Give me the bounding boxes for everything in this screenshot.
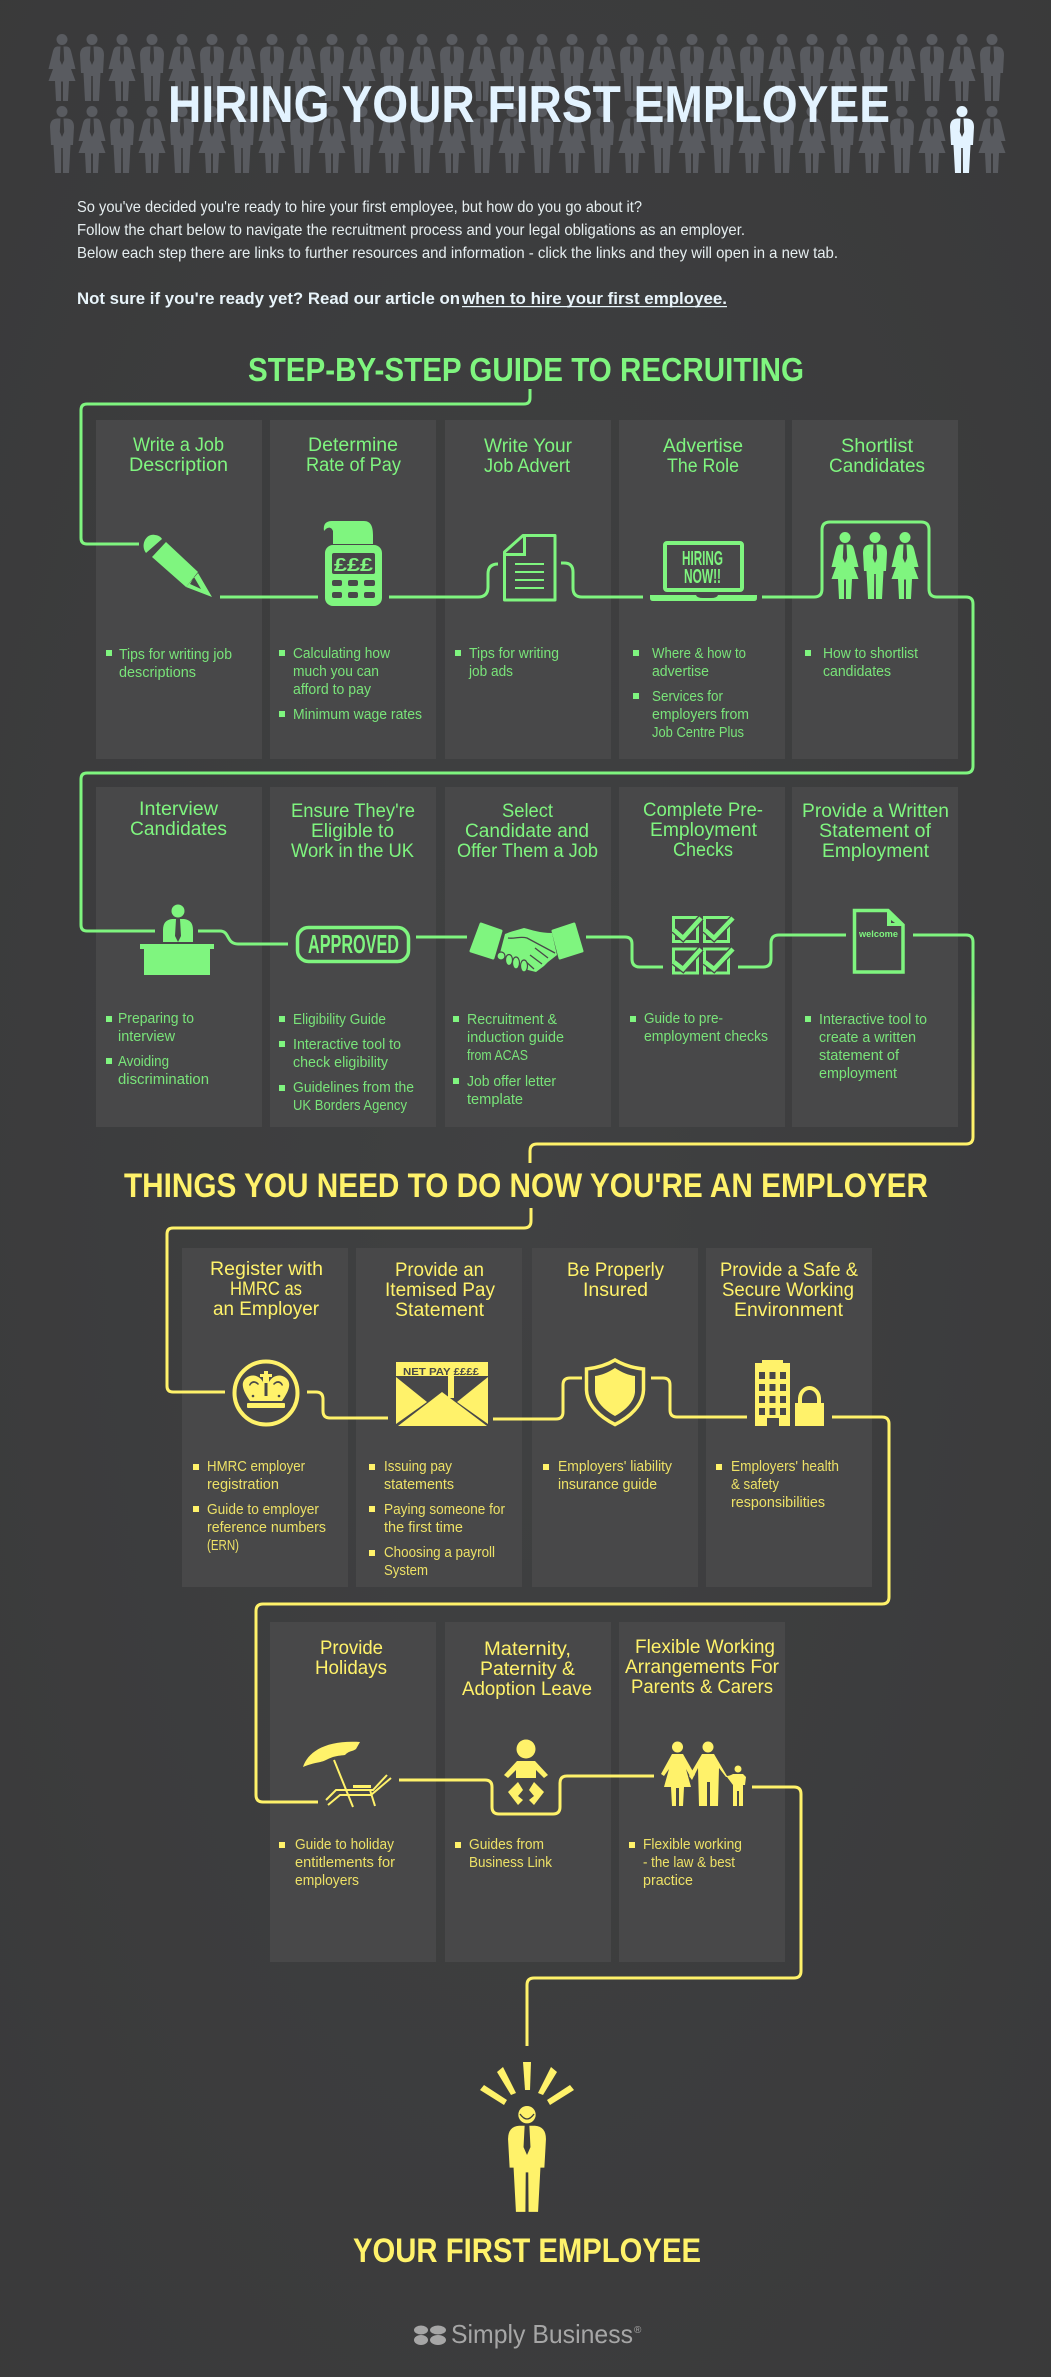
panel: interview candidates: Candidates [130, 819, 227, 840]
panel: be properly insured: Insured [583, 1280, 648, 1301]
connector: checks to letter [738, 935, 846, 967]
heading: step-by-step guide: STEP-BY-STEP GUIDE TO RECRUITING [248, 351, 804, 388]
panel: write your job advert: Tips for writing [469, 646, 559, 662]
panel: ensure eligible to work: UK Borders Agency [293, 1098, 408, 1114]
title: HIRING YOUR FIRST EMPLOYEE [168, 76, 890, 134]
panel: flexible working arrangements: Arrangements For [625, 1657, 780, 1678]
panel: register with HMRC: HMRC employer [207, 1459, 305, 1475]
connector: handshake to checks [586, 937, 663, 967]
heading: your first employee: YOUR FIRST EMPLOYEE [353, 2232, 701, 2270]
panel: select candidate and offer job: induction guide [467, 1030, 564, 1046]
panel: write a job description: Tips for writing job [119, 647, 232, 663]
panel: ensure eligible to work: Eligibility Guide [293, 1012, 386, 1028]
panel: write your job advert: Job Advert [484, 456, 571, 477]
connector: HMRC to envelope [307, 1392, 388, 1418]
panel: advertise the role [619, 420, 785, 759]
heading: things you need to do: THINGS YOU NEED TO DO NOW YOU'RE AN EMPLOYER [124, 1167, 928, 1205]
panel: be properly insured: Employers' liability [558, 1459, 673, 1475]
panel: advertise the role: advertise [652, 664, 709, 680]
panel: write your job advert: Write Your [484, 436, 573, 457]
panel: register with HMRC: registration [207, 1477, 279, 1493]
intro text [77, 199, 838, 262]
panel: select candidate and offer job: template [467, 1092, 523, 1108]
panel: select candidate and offer job: Recruitment & [467, 1012, 557, 1028]
panel: maternity, paternity and adoption leave: Adoption Leave [462, 1679, 592, 1700]
panel: pre-employment checks [619, 787, 785, 1127]
panel: safe and secure environment: Provide a Safe & [720, 1260, 858, 1281]
panel: pre-employment checks: Complete Pre- [643, 800, 763, 821]
panel: interview candidates: discrimination [118, 1072, 209, 1088]
panel: select candidate and offer job: from ACAS [467, 1048, 528, 1064]
panel: write your job advert: job ads [468, 664, 513, 680]
highlighted employee figure [950, 106, 974, 173]
panel: ensure eligible to work: Guidelines from the [293, 1080, 414, 1096]
panel: safe and secure environment: Environment [734, 1300, 844, 1321]
panel: register with HMRC: Register with [210, 1259, 323, 1280]
panel: provide holidays: employers [295, 1873, 359, 1889]
intro text: Below each step there are links to further resources and information - click the links and they will open in a new tab. [77, 245, 838, 262]
icon: calculator: £££ [334, 555, 373, 575]
connector: lounger to baby [399, 1776, 654, 1814]
icon: person at desk [140, 904, 214, 975]
panel: written statement of employment: create a written [819, 1030, 916, 1046]
connector: interview to approved [198, 931, 288, 944]
icon: final employee with rays [480, 2062, 574, 2212]
panel: ensure eligible to work: Interactive tool to [293, 1037, 401, 1053]
bold prompt with link [77, 289, 727, 308]
icon: parasol and lounger [303, 1742, 391, 1807]
panel: safe and secure environment: responsibilities [731, 1495, 825, 1511]
connector: heading to HMRC [167, 1208, 531, 1392]
panel: ensure eligible to work: Work in the UK [291, 841, 414, 862]
connector: approved to handshake [416, 936, 467, 938]
panel: written statement of employment [792, 787, 958, 1127]
panel: maternity, paternity and adoption leave: Business Link [469, 1855, 553, 1871]
panel: flexible working arrangements: practice [643, 1873, 693, 1889]
panel: register with HMRC: HMRC as [230, 1279, 302, 1300]
panel: advertise the role: employers from [652, 707, 749, 723]
panel: provide holidays: entitlements for [295, 1855, 395, 1871]
panel: advertise the role: Where & how to [652, 646, 746, 662]
panel: written statement of employment: employment [819, 1066, 897, 1082]
icon: pencil [144, 535, 212, 597]
panel: shortlist candidates: Candidates [829, 456, 925, 477]
panel: safe and secure environment: Secure Working [722, 1280, 854, 1301]
panel: write a job description: Description [129, 455, 228, 476]
panel: pre-employment checks: employment checks [644, 1029, 768, 1045]
icon: four checkboxes [674, 918, 733, 973]
logo: Simply Business: Simply Business [451, 2319, 633, 2349]
panel: select candidate and offer job: Select [502, 801, 554, 822]
panel: register with HMRC [182, 1248, 348, 1587]
icon: calculator [324, 521, 382, 606]
panel: select candidate and offer job [445, 787, 611, 1127]
panel: ensure eligible to work: Eligible to [311, 821, 394, 842]
icon: laptop [650, 543, 757, 601]
panel: provide holidays: Provide [320, 1638, 383, 1659]
connector: shield to building [651, 1378, 747, 1417]
panel: register with HMRC: an Employer [213, 1299, 320, 1320]
panel: write a job description [96, 420, 262, 759]
panel: written statement of employment: Provide a Written [802, 801, 949, 822]
icon: family [661, 1742, 746, 1806]
panel: interview candidates: interview [118, 1029, 176, 1045]
panel: flexible working arrangements: Flexible Working [635, 1637, 775, 1658]
panel: itemised pay statement: System [384, 1563, 428, 1579]
panel: written statement of employment: Statement of [819, 821, 932, 842]
panel: advertise the role: The Role [667, 456, 739, 477]
crowd of people illustration [48, 34, 1006, 173]
panel: itemised pay statement: statements [384, 1477, 454, 1493]
icon: approved stamp [298, 928, 408, 962]
connector: letter to second heading with colour fade [530, 935, 973, 1163]
panel: flexible working arrangements [619, 1622, 785, 1962]
panel: pre-employment checks: Guide to pre- [644, 1011, 723, 1027]
panel: shortlist candidates: How to shortlist [823, 646, 918, 662]
panel: safe and secure environment: Employers' health [731, 1459, 839, 1475]
panel: itemised pay statement: Itemised Pay [385, 1280, 495, 1301]
panel: provide holidays: Guide to holiday [295, 1837, 395, 1853]
panel: ensure eligible to work: check eligibility [293, 1055, 389, 1071]
panel: advertise the role: Job Centre Plus [652, 725, 744, 741]
panel: shortlist candidates: candidates [823, 664, 891, 680]
connector: heading to pencil [81, 389, 530, 544]
panel: written statement of employment: Employment [822, 841, 930, 862]
connector: envelope to shield [493, 1378, 582, 1419]
connector: calculator to document [389, 564, 498, 597]
intro text: So you've decided you're ready to hire your first employee, but how do you go about it? [77, 199, 642, 216]
icon: welcome letter: welcome [858, 929, 898, 939]
panel: flexible working arrangements: - the law & best [643, 1855, 735, 1871]
icon: three candidates [832, 532, 918, 599]
panel: provide holidays: Holidays [315, 1658, 387, 1679]
icon: handshake [471, 924, 582, 972]
panel: select candidate and offer job: Candidate and [465, 821, 589, 842]
panel: determine rate of pay: Rate of Pay [306, 455, 401, 476]
bold prompt with link: Not sure if you're ready yet? Read our article on [77, 289, 460, 308]
panel: write your job advert [445, 420, 611, 759]
panel: determine rate of pay [270, 420, 436, 759]
logo: Simply Business: ® [634, 2325, 642, 2336]
panel: itemised pay statement: Statement [395, 1300, 485, 1321]
panel: be properly insured [532, 1248, 698, 1587]
panel: determine rate of pay: much you can [293, 664, 379, 680]
icon: shield [586, 1360, 644, 1424]
panel: itemised pay statement: Provide an [395, 1260, 484, 1281]
panel: advertise the role: Advertise [663, 436, 743, 457]
connector: laptop around candidates to second row [81, 522, 973, 931]
panel: maternity, paternity and adoption leave: Maternity, [484, 1639, 571, 1660]
connector: family to final employee [527, 1787, 801, 2046]
panel: determine rate of pay: Calculating how [293, 646, 390, 662]
panel: write a job description: Write a Job [133, 435, 224, 456]
icon: crown in circle [234, 1362, 298, 1424]
panel: written statement of employment: Interactive tool to [819, 1012, 927, 1028]
icon: pay envelope [396, 1362, 488, 1426]
panel: maternity, paternity and adoption leave [445, 1622, 611, 1962]
panel: be properly insured: insurance guide [558, 1477, 657, 1493]
panel: interview candidates: Preparing to [118, 1011, 194, 1027]
panel: determine rate of pay: Minimum wage rates [293, 707, 422, 723]
panel: advertise the role: Services for [652, 689, 723, 705]
panel: itemised pay statement: Paying someone for [384, 1502, 505, 1518]
panel: register with HMRC: (ERN) [207, 1538, 239, 1554]
panel: maternity, paternity and adoption leave: Paternity & [480, 1659, 575, 1680]
panel: select candidate and offer job: Job offer letter [467, 1074, 556, 1090]
panel: select candidate and offer job: Offer Them a Job [457, 841, 598, 862]
icon: document [503, 534, 555, 600]
panel: determine rate of pay: Determine [308, 435, 398, 456]
panel: shortlist candidates: Shortlist [841, 436, 914, 457]
panel: itemised pay statement: the first time [384, 1520, 463, 1536]
panel: interview candidates: Avoiding [118, 1054, 169, 1070]
panel: pre-employment checks: Employment [650, 820, 758, 841]
panel: shortlist candidates [792, 420, 958, 759]
panel: itemised pay statement: Issuing pay [384, 1459, 453, 1475]
connector: document to laptop [561, 563, 643, 597]
panel: provide holidays [270, 1622, 436, 1962]
panel: interview candidates: Interview [139, 799, 218, 820]
icon: welcome letter [854, 910, 903, 972]
panel: be properly insured: Be Properly [567, 1260, 664, 1281]
panel: flexible working arrangements: Parents & Carers [631, 1677, 773, 1698]
connector: pencil to calculator [220, 596, 318, 598]
panel: flexible working arrangements: Flexible working [643, 1837, 742, 1853]
panel: ensure eligible to work [270, 787, 436, 1127]
panel: safe and secure environment: & safety [731, 1477, 780, 1493]
icon: laptop: NOW!! [684, 566, 721, 588]
bold prompt with link: when to hire your first employee. [461, 289, 727, 308]
icon: laptop: HIRING [682, 548, 723, 570]
intro text: Follow the chart below to navigate the recruitment process and your legal obligations as an employer. [77, 222, 745, 239]
icon: pay envelope: NET PAY ££££ [403, 1366, 479, 1378]
panel: written statement of employment: statement of [819, 1048, 900, 1064]
icon: baby [504, 1740, 548, 1805]
panel: interview candidates [96, 787, 262, 1127]
panel: ensure eligible to work: Ensure They're [291, 801, 415, 822]
panel: write a job description: descriptions [119, 665, 196, 681]
panel: register with HMRC: Guide to employer [207, 1502, 319, 1518]
panel: safe and secure environment [706, 1248, 872, 1587]
panel: pre-employment checks: Checks [673, 840, 733, 861]
panel: maternity, paternity and adoption leave: Guides from [469, 1837, 544, 1853]
connector: lock to third row [256, 1417, 889, 1802]
panel: register with HMRC: reference numbers [207, 1520, 326, 1536]
panel: itemised pay statement: Choosing a payroll [384, 1545, 495, 1561]
icon: building and padlock [755, 1360, 824, 1426]
icon: approved stamp: APPROVED [308, 929, 399, 959]
panel: itemised pay statement [356, 1248, 522, 1587]
panel: determine rate of pay: afford to pay [293, 682, 372, 698]
